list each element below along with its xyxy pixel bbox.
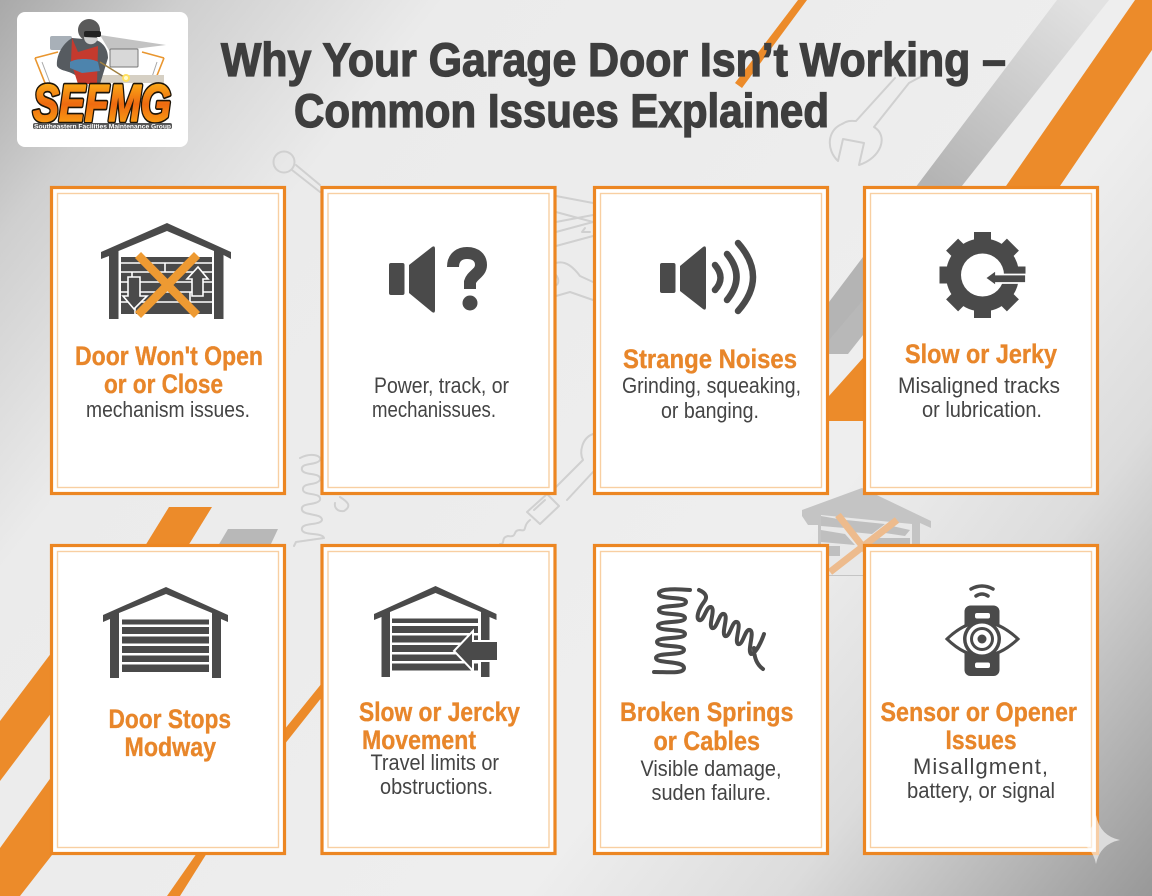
body text: Grinding, squeaking, xyxy=(622,373,801,398)
heading: Strange Noises xyxy=(623,344,797,374)
icon: gear with arrow xyxy=(940,232,1026,318)
title xyxy=(221,33,1006,137)
icon: speaker with question mark xyxy=(389,246,481,313)
body text: Visible damage, xyxy=(640,756,782,781)
ghost garage icon xyxy=(802,488,931,576)
body text xyxy=(640,756,782,805)
heading: Slow or Jercky xyxy=(359,697,520,727)
icon: sensor with eye xyxy=(947,586,1018,676)
body text xyxy=(372,373,509,422)
panel: door stops midway xyxy=(52,546,284,854)
heading: Sensor or Opener xyxy=(880,697,1077,727)
body text xyxy=(622,373,801,423)
heading xyxy=(108,704,231,762)
heading xyxy=(880,697,1077,755)
body text xyxy=(370,750,499,799)
heading: Issues xyxy=(946,725,1016,755)
logo: SEFMG wordmark: SEFMG xyxy=(33,75,171,133)
heading: or Cables xyxy=(654,726,760,756)
body text xyxy=(898,373,1060,422)
icon: garage with crossed door xyxy=(101,223,231,319)
heading xyxy=(75,341,263,399)
logo: welder figure xyxy=(57,19,130,84)
panel: sensor or opener issues xyxy=(864,546,1098,854)
title: Common Issues Explained xyxy=(294,84,829,137)
tool: rod top left xyxy=(274,152,320,192)
body text: Misallgment, xyxy=(913,754,1048,779)
heading: Door Stops xyxy=(108,704,231,734)
body text: mechanissues. xyxy=(372,397,496,422)
body text: suden failure. xyxy=(652,780,771,805)
panel: slow or jerky xyxy=(864,188,1098,494)
body text: or banging. xyxy=(661,398,759,423)
heading xyxy=(359,697,520,755)
body text: obstructions. xyxy=(380,774,493,799)
body text: battery, or signal xyxy=(907,778,1055,803)
panel: door won't open or close xyxy=(52,188,284,494)
heading: Movement xyxy=(362,725,476,755)
icon: closed garage xyxy=(103,587,228,678)
heading: Modway xyxy=(124,732,216,762)
body text: or lubrication. xyxy=(922,397,1042,422)
title: Why Your Garage Door Isn’t Working – xyxy=(221,33,1006,86)
logo card xyxy=(17,12,188,147)
panel: broken springs or cables xyxy=(594,546,828,854)
heading xyxy=(620,697,794,756)
body text: mechanism issues. xyxy=(86,397,250,422)
body text xyxy=(907,754,1055,803)
heading: Door Won't Open xyxy=(75,341,263,371)
panel: power, track, or mechanism xyxy=(322,188,555,494)
panel: slow or jercky movement xyxy=(322,546,555,854)
panel: strange noises xyxy=(594,188,828,494)
icon: springs xyxy=(654,589,764,672)
tool: wrench top right xyxy=(830,76,922,165)
logo: building outline xyxy=(35,52,164,83)
tool: pliers and wrench centre xyxy=(500,196,593,544)
logo: SEFMG wordmark: SEFMG xyxy=(33,75,171,133)
heading: Broken Springs xyxy=(620,697,794,727)
background line art: tools xyxy=(274,76,931,576)
icon: garage with arrow xyxy=(374,586,498,677)
body text: Travel limits or xyxy=(370,750,499,775)
heading: or or Close xyxy=(104,369,223,399)
body text: Power, track, or xyxy=(374,373,509,398)
tool: spring left centre xyxy=(294,455,348,546)
icon: corner sparkle xyxy=(1072,815,1120,864)
heading: Slow or Jerky xyxy=(905,339,1057,369)
body text: Misaligned tracks xyxy=(898,373,1060,398)
logo: tagline: Southeastern Facilities Maintenance Group xyxy=(34,124,171,130)
logo: roof and machines xyxy=(100,35,166,52)
icon: speaker with sound waves xyxy=(660,243,753,311)
